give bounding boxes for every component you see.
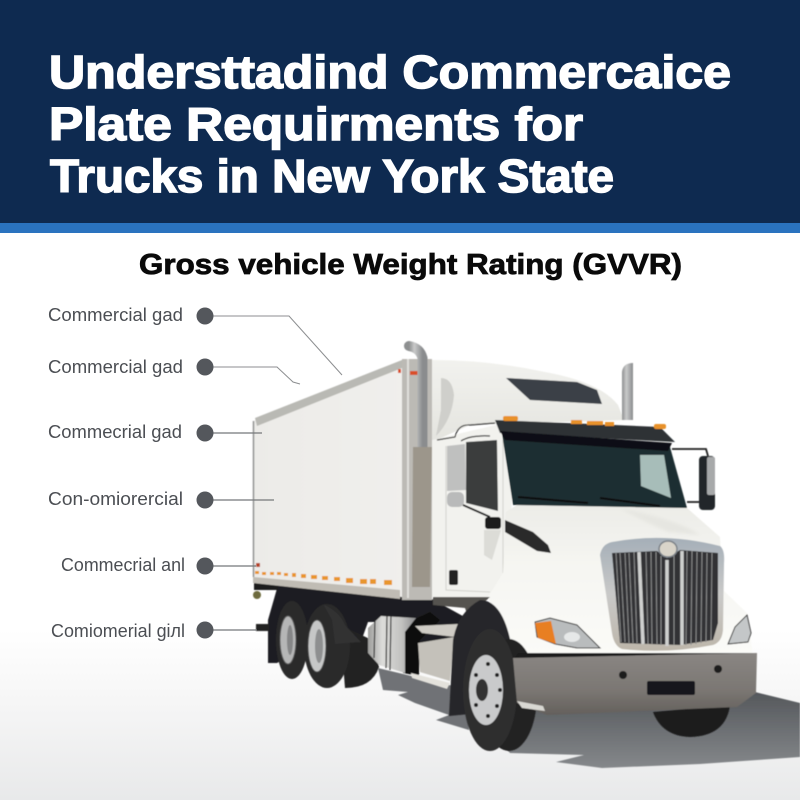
right mirror [672, 449, 715, 510]
header navy background [0, 0, 800, 223]
cab clearance lights [503, 416, 666, 429]
fuel tank [368, 612, 440, 676]
callout 6: Comiomerial giлl [51, 621, 185, 641]
cab door [432, 424, 512, 598]
hood contour [620, 508, 700, 535]
rear tail light [256, 563, 260, 567]
visor [495, 420, 675, 442]
fairing shadow [436, 378, 454, 436]
ground shadows [378, 668, 800, 768]
callout 1: Commercial gad [48, 305, 183, 325]
right front tire [653, 705, 730, 737]
rear fender [323, 604, 361, 644]
callout 3: Commecrial gad [48, 422, 182, 442]
rear edge [252, 421, 254, 577]
side window [466, 440, 498, 511]
exhaust stack right [622, 363, 633, 420]
box side panel [253, 361, 402, 597]
left mirror [447, 444, 501, 529]
red clearance lights [398, 369, 418, 375]
bottom rail [253, 577, 400, 599]
rear tires [276, 601, 379, 688]
title: Trucks in New York State [50, 150, 614, 202]
left headlight [535, 618, 600, 648]
hood and front body [488, 503, 753, 660]
grille emblem [659, 541, 677, 557]
rear hitch [253, 583, 278, 631]
callout 6 [51, 621, 257, 641]
callout 4: Con-omiorercial [48, 489, 183, 509]
callout 1 [48, 305, 342, 375]
callout 5 [61, 555, 256, 575]
bumper [513, 653, 757, 715]
windshield [500, 431, 687, 508]
right headlight [728, 615, 751, 644]
cab rear and roof fairing [432, 360, 624, 442]
header panel [0, 0, 800, 233]
door seam [446, 440, 503, 592]
callout 2 [48, 357, 300, 384]
door handle [449, 570, 458, 585]
front wheel arch and mud flap [449, 600, 520, 720]
front tire [463, 629, 537, 751]
callout list [48, 305, 342, 641]
title: Plate Requirments for [49, 98, 583, 150]
marker lights [255, 571, 392, 585]
exhaust stack left [409, 346, 432, 587]
grille [600, 538, 724, 651]
steps and toolbox [411, 624, 458, 689]
side duct [505, 520, 551, 553]
title [49, 46, 731, 202]
header blue stripe [0, 223, 800, 233]
cargo box undercarriage [268, 585, 470, 663]
window trim [437, 423, 495, 441]
title: Understtadind Commercaice [49, 46, 731, 98]
callout 2: Commercial gad [48, 357, 183, 377]
callout 4 [48, 489, 274, 509]
sunroof [506, 378, 602, 404]
page background [0, 233, 800, 800]
front frame [402, 359, 432, 600]
cargo box [253, 359, 432, 600]
top rail [255, 360, 402, 426]
callout 3 [48, 422, 262, 442]
fender shading [433, 597, 490, 617]
door shadow [484, 530, 501, 560]
callout 5: Commecrial anl [61, 555, 185, 575]
truck [253, 346, 757, 751]
subtitle: Gross vehicle Weight Rating (GVVR) [139, 249, 682, 281]
